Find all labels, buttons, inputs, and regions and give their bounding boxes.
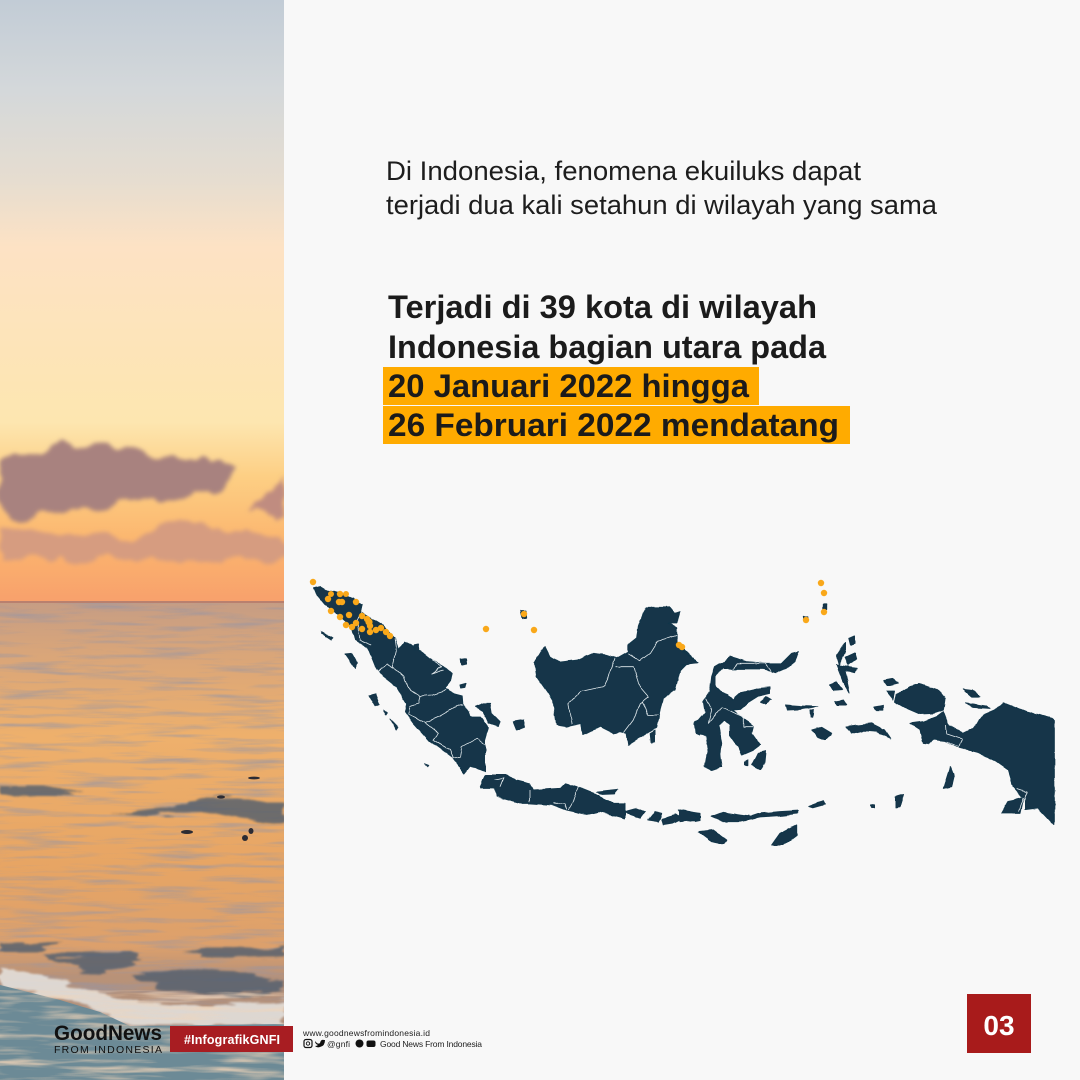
Bird's Head: [895, 684, 945, 714]
western islands: [314, 587, 700, 825]
Kalimantan: [535, 607, 698, 745]
Dolak island: [1002, 798, 1023, 813]
icon: facebook: [356, 1040, 364, 1048]
islands: [314, 587, 1054, 845]
heading: 20 Januari 2022 hingga: [388, 368, 749, 404]
heading: [383, 289, 850, 444]
heading: 26 Februari 2022 mendatang: [388, 407, 839, 443]
Maluku and Nusa Tenggara islands: [680, 604, 990, 845]
intro text: terjadi dua kali setahun di wilayah yang sama: [386, 190, 938, 220]
page number badge: [967, 994, 1031, 1053]
footer contact info: [302, 1028, 482, 1049]
Papua: [910, 702, 1054, 825]
date highlight bar 1: [383, 367, 759, 405]
footer contact info: @gnfi: [327, 1039, 350, 1049]
date highlight bar 2: [383, 406, 850, 444]
logo: GoodNews From Indonesia: GoodNews: [54, 1022, 162, 1045]
hashtag badge: [170, 1026, 293, 1052]
hashtag badge: #InfografikGNFI: [184, 1033, 280, 1047]
photo: sunset over the sea: [0, 0, 284, 1080]
intro text: [386, 156, 938, 220]
Sumatra: [314, 587, 488, 773]
intro text: Di Indonesia, fenomena ekuiluks dapat: [386, 156, 861, 186]
logo: GoodNews From Indonesia: FROM INDONESIA: [54, 1044, 162, 1056]
small islands west: [322, 611, 700, 825]
logo: GoodNews From Indonesia: [54, 1022, 162, 1056]
map of Indonesia: [310, 579, 1054, 845]
heading: Indonesia bagian utara pada: [388, 329, 826, 365]
page number badge: 03: [983, 1010, 1015, 1041]
footer contact info: www.goodnewsfromindonesia.id: [302, 1028, 430, 1038]
city dots: [310, 579, 827, 650]
icon: youtube: [366, 1040, 376, 1047]
footer contact info: Good News From Indonesia: [380, 1039, 482, 1049]
icon: twitter: [315, 1040, 325, 1047]
province borders: [357, 612, 677, 810]
Java: [480, 775, 625, 818]
eastern islands: [680, 604, 1054, 845]
icon: instagram: [304, 1040, 312, 1048]
heading: Terjadi di 39 kota di wilayah: [388, 289, 817, 325]
province borders east: [706, 663, 1027, 812]
Sulawesi: [695, 652, 798, 770]
